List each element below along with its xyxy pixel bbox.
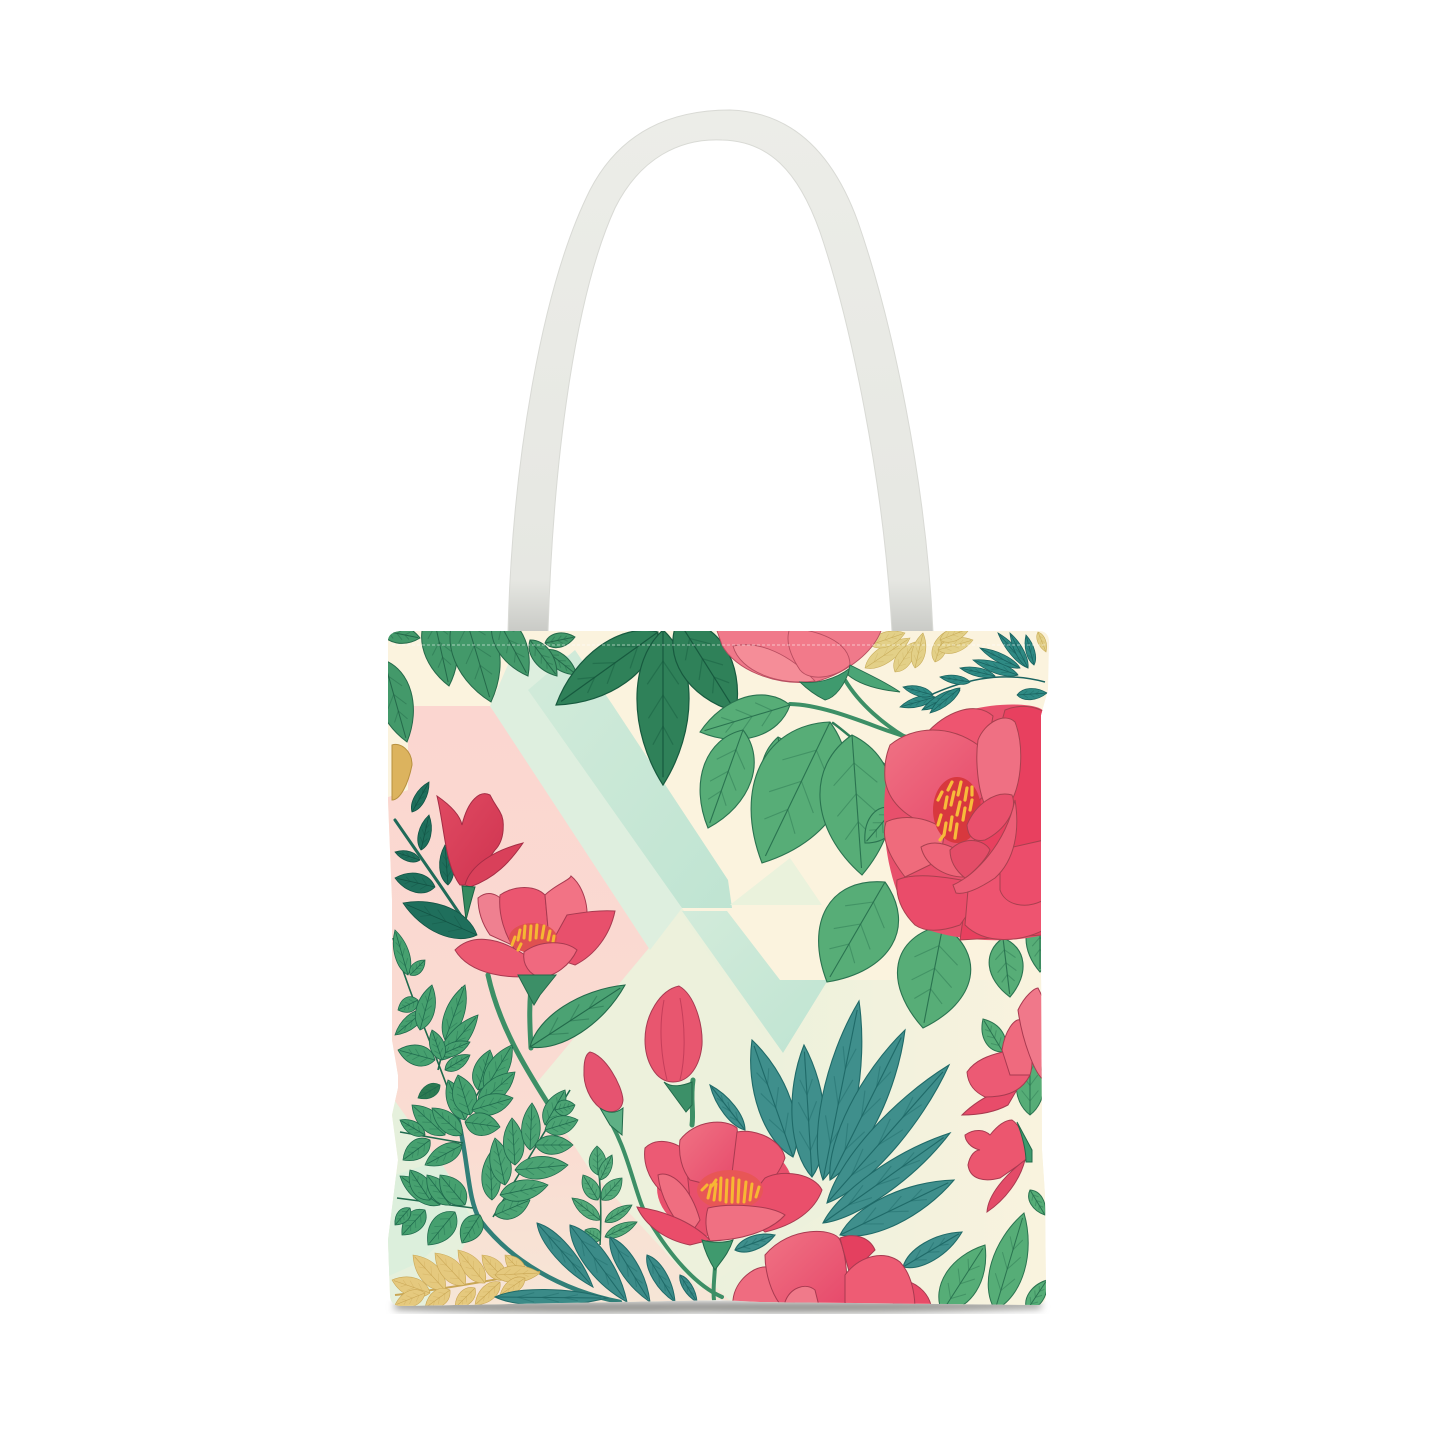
tote bag product image bbox=[388, 110, 1049, 1314]
small fern bbox=[568, 1146, 639, 1246]
gold fern bottom left bbox=[392, 1250, 540, 1306]
pink flower centre left bbox=[455, 876, 615, 1005]
red tulip flower bbox=[437, 794, 523, 920]
bag ground shadow bbox=[394, 1302, 1042, 1313]
top peony flower bbox=[716, 628, 900, 700]
cream fabric base bbox=[380, 625, 1060, 1315]
pale triangle bbox=[730, 858, 822, 905]
large peony flower right bbox=[884, 705, 1044, 940]
green leaves right and bottom right bbox=[938, 1018, 1046, 1305]
calyx bbox=[800, 668, 850, 700]
stamen bbox=[509, 923, 557, 953]
deeper mint chevron band bbox=[528, 650, 732, 908]
tulip bud tall bbox=[645, 986, 702, 1112]
bag body with floral print bbox=[388, 631, 1049, 1306]
light green leaves upper right bbox=[699, 694, 1042, 1029]
teal leaves bottom left bbox=[494, 1222, 698, 1304]
teal palm fan bbox=[705, 998, 967, 1275]
dark green leaves top centre bbox=[555, 631, 738, 786]
leaf under pink flower bbox=[529, 984, 626, 1048]
carrying handle bbox=[508, 110, 933, 632]
stems and vines bbox=[395, 680, 907, 1302]
bottom pink peony bbox=[730, 1231, 932, 1310]
cream patch lower centre bbox=[590, 1170, 711, 1290]
gold flower at left edge bbox=[392, 744, 412, 800]
teal branch top right bbox=[899, 630, 1047, 717]
tulip bud small bbox=[584, 1052, 623, 1135]
teal sprig left bbox=[394, 781, 478, 940]
stitched top seam bbox=[392, 644, 1046, 646]
pale mint lower field bbox=[380, 908, 1060, 1310]
lower mint V bbox=[682, 911, 828, 1053]
fern fronds left bbox=[392, 929, 516, 1246]
right side flowers bbox=[962, 988, 1044, 1212]
central pink flower bbox=[637, 1122, 822, 1270]
gold sprig top right bbox=[864, 631, 1047, 672]
stamen bbox=[933, 777, 981, 843]
stamen bbox=[697, 1170, 763, 1210]
pink hexagon panel bbox=[380, 706, 740, 1310]
fern frond centre bbox=[481, 1085, 581, 1224]
mint corner lower left bbox=[388, 1165, 470, 1276]
pale mint chevron band bbox=[490, 655, 682, 950]
green leaves top left bbox=[388, 631, 576, 743]
